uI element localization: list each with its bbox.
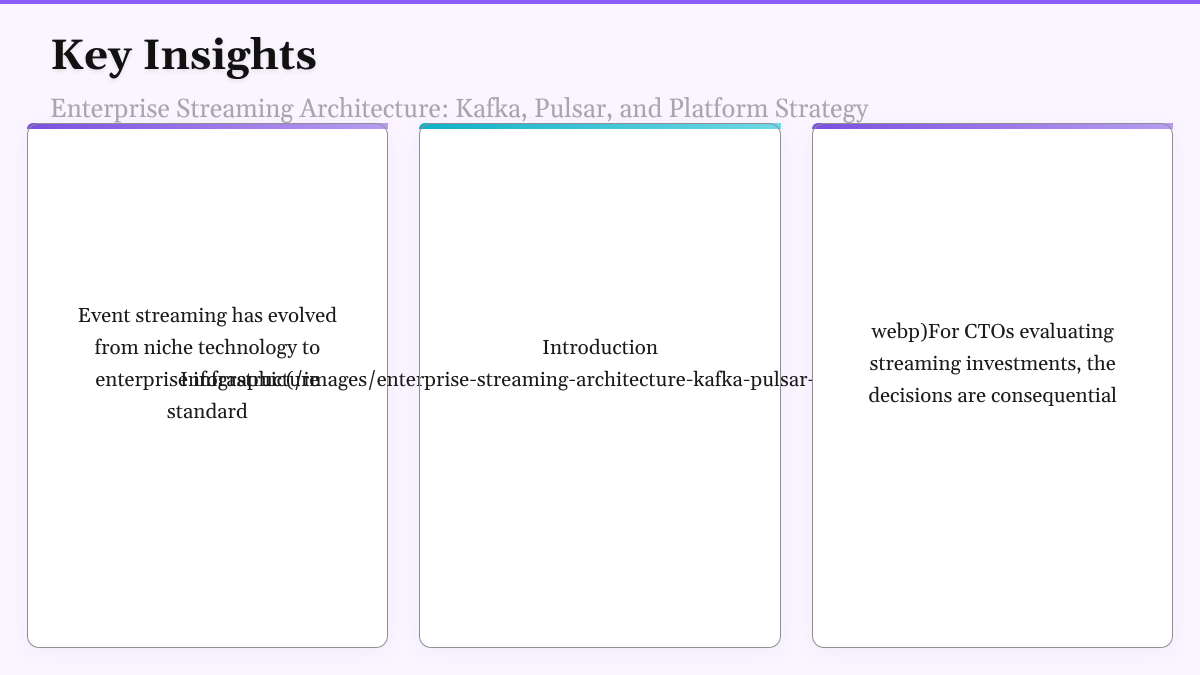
card 2 text bbox=[180, 336, 1086, 394]
title: Key Insights bbox=[50, 31, 317, 84]
panel: card 2: Infographic(/images/enterprise-streaming-architecture-kafka-pulsar-platform-strategy-infographic bbox=[180, 368, 1086, 394]
card 1 text: enterprise infrastructure bbox=[95, 368, 319, 394]
card 1 text: Event streaming has evolved bbox=[78, 304, 337, 330]
card 3 text bbox=[868, 320, 1117, 410]
card 2 top accent bbox=[419, 123, 781, 129]
panel: card 2 bbox=[419, 123, 781, 648]
card 1 top accent bbox=[27, 123, 388, 129]
card 3 text: streaming investments, the bbox=[870, 352, 1116, 378]
card 2 text: Introduction bbox=[542, 336, 658, 362]
card 3 top accent bbox=[812, 123, 1173, 129]
subtitle: Enterprise Streaming Architecture: Kafka, Pulsar, and Platform Strategy bbox=[50, 93, 868, 126]
card 1 text: from niche technology to bbox=[94, 336, 320, 362]
card 1 text bbox=[78, 304, 337, 426]
panel: card 1 bbox=[27, 123, 388, 648]
card 1 text: standard bbox=[167, 400, 248, 426]
card 3 text: decisions are consequential bbox=[868, 384, 1117, 410]
panel: card 3 bbox=[812, 123, 1173, 648]
card 3 text: webp)For CTOs evaluating bbox=[872, 320, 1114, 346]
top accent bar bbox=[0, 0, 1200, 4]
